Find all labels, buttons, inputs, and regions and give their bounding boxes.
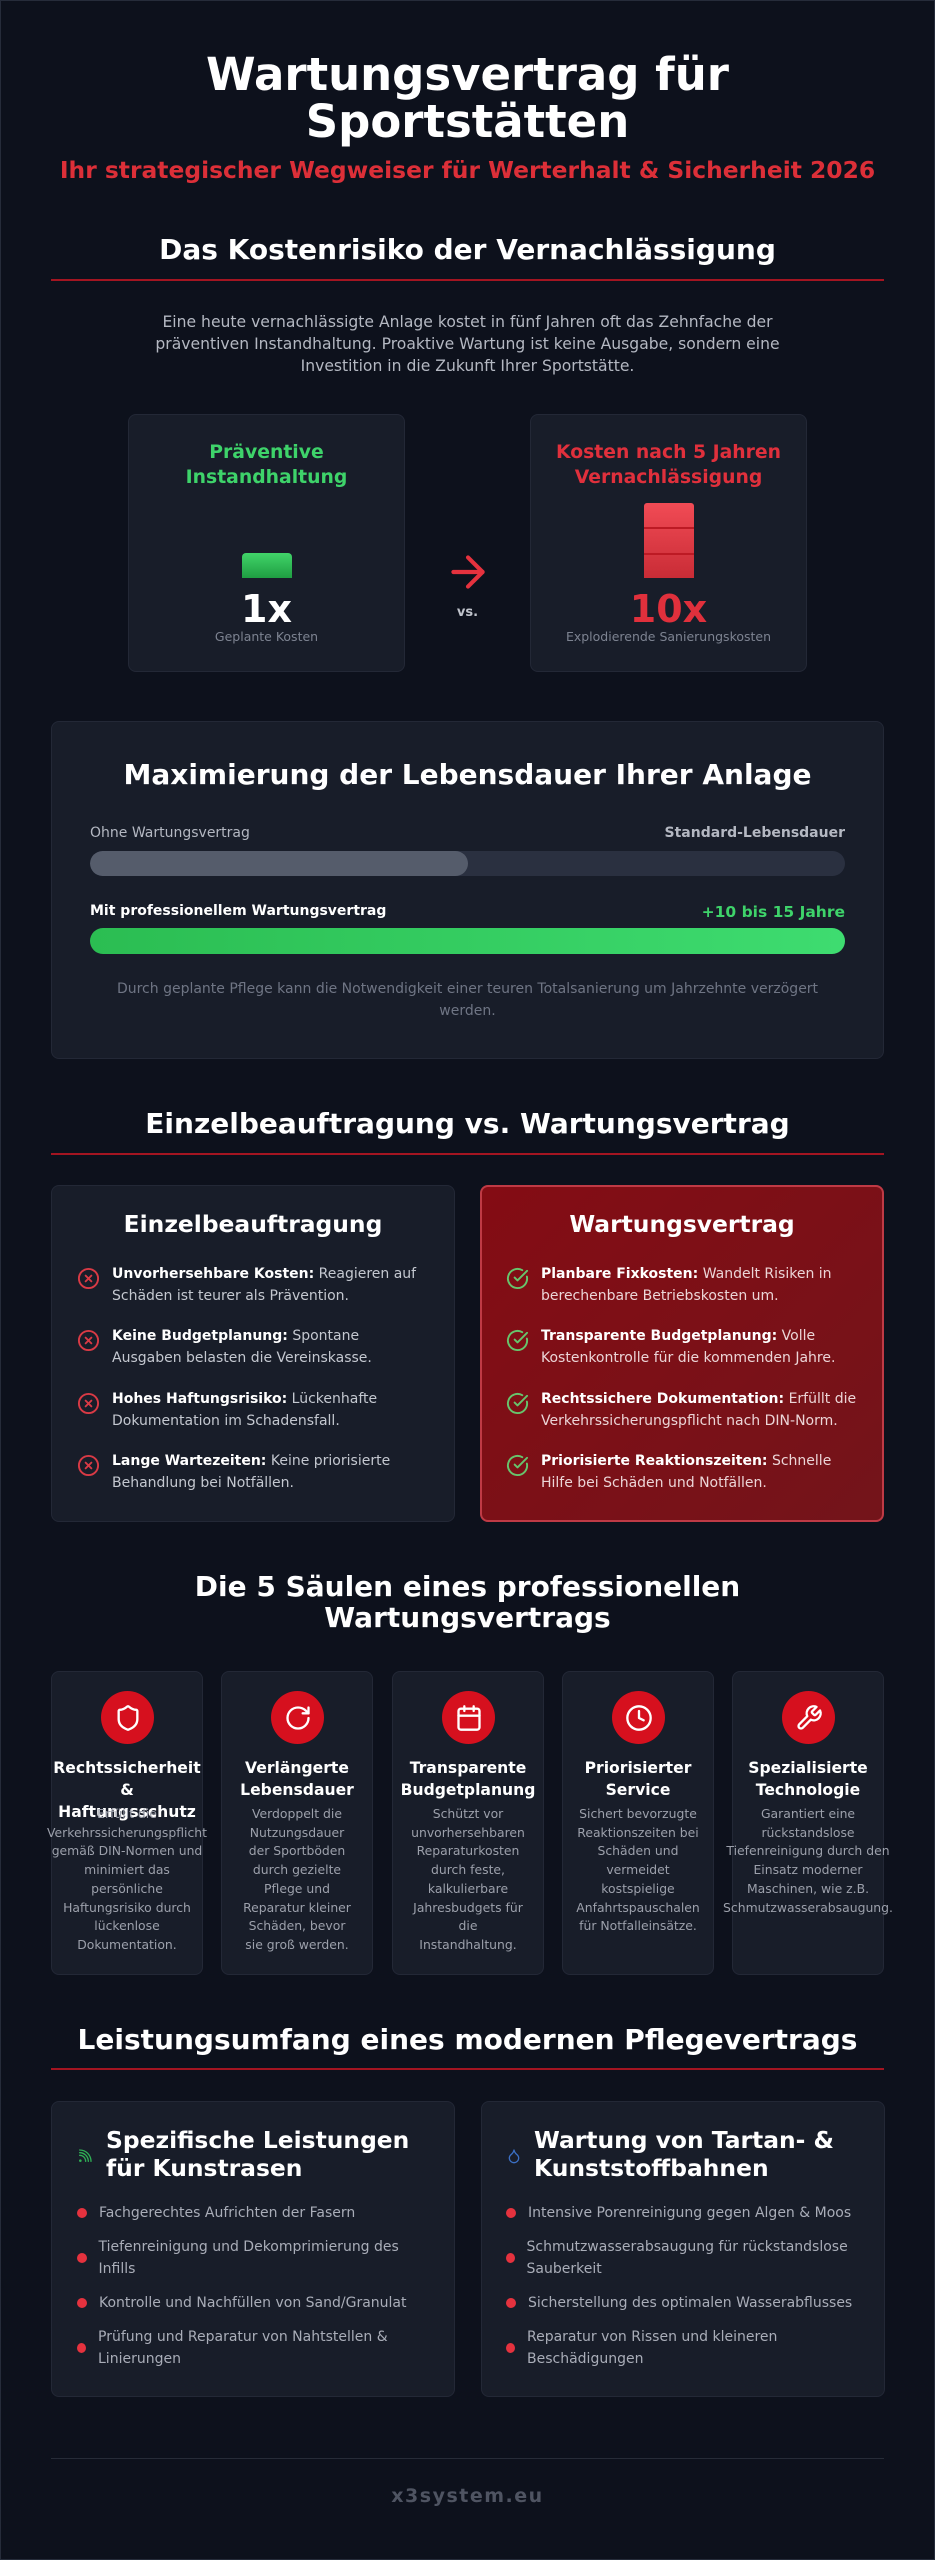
pillar text: Dokumentation. — [77, 1937, 177, 1952]
pillar text: rückstandslose — [761, 1825, 855, 1840]
panel heading: Kunststoffbahnen — [534, 2154, 769, 2182]
card heading red: Kosten nach 5 Jahren — [556, 442, 781, 463]
item 1: Planbare Fixkosten: Wandelt Risiken in — [541, 1266, 832, 1282]
intro text: Investition in die Zukunft Ihrer Sportstätte. — [301, 357, 634, 375]
icon: shield — [101, 1691, 154, 1744]
list item 4 — [77, 2328, 388, 2366]
list item 2 — [506, 2238, 848, 2276]
pillar text: durch gezielte — [253, 1862, 341, 1877]
pillar 3 — [392, 1671, 544, 1975]
card heading red: Vernachlässigung — [575, 467, 762, 488]
pillar text — [243, 1806, 351, 1952]
pillar text: Garantiert eine — [761, 1806, 855, 1821]
card heading green — [186, 442, 347, 488]
pillar 5 — [732, 1671, 884, 1975]
panel: Kunstrasen — [51, 2101, 455, 2397]
pillar title: Service — [606, 1781, 670, 1799]
icon: refresh — [271, 1691, 324, 1744]
item 3 — [78, 1391, 377, 1429]
pillar 4 — [562, 1671, 714, 1975]
pillar title — [53, 1759, 201, 1821]
pillar title: Haftungsschutz — [58, 1803, 196, 1821]
item 1 — [506, 1266, 832, 1304]
label right 1: Standard-Lebensdauer — [665, 825, 845, 841]
item 4 — [78, 1453, 390, 1491]
item 1 — [78, 1266, 416, 1304]
pillar title: Technologie — [756, 1781, 860, 1799]
subtitle: Ihr strategischer Wegweiser für Werterhalt & Sicherheit 2026 — [60, 156, 875, 184]
heading: 5 Säulen: Wartungsvertrags — [324, 1601, 611, 1634]
pillar text: Pflege und — [264, 1881, 330, 1896]
card heading green: Instandhaltung — [186, 467, 347, 488]
panel heading: Spezifische Leistungen — [106, 2126, 409, 2154]
pillar text: Schäden und — [598, 1843, 678, 1858]
item 4 — [506, 1453, 831, 1491]
pillar title: Lebensdauer — [240, 1781, 354, 1799]
pillar text — [723, 1806, 893, 1915]
intro text: präventiven Instandhaltung. Proaktive Wartung ist keine Ausgabe, sondern eine — [155, 335, 780, 353]
vs label: vs. — [457, 605, 478, 620]
item 4: Priorisierte Reaktionszeiten: Schnelle — [541, 1453, 831, 1469]
icon: droplet — [508, 2149, 520, 2164]
pillar text: Schmutzwasserabsaugung. — [723, 1900, 893, 1915]
pillar text: minimiert das — [84, 1862, 170, 1877]
list item 1: Fachgerechtes Aufrichten der Fasern — [99, 2204, 355, 2220]
pillar text: gemäß DIN-Normen und — [52, 1843, 202, 1858]
item 1: Unvorhersehbare Kosten: Reagieren auf — [112, 1266, 416, 1282]
list item 2: Infills — [98, 2260, 135, 2276]
pillar text: Haftungsrisiko durch — [63, 1900, 191, 1915]
pillar 1 — [51, 1671, 203, 1975]
icon: rss — [79, 2149, 92, 2162]
item 2: Kostenkontrolle für die kommenden Jahre. — [541, 1350, 835, 1366]
pillar text: Tiefenreinigung durch den — [726, 1843, 890, 1858]
item 3: Hohes Haftungsrisiko: Lückenhafte — [112, 1391, 377, 1407]
pillar title: Priorisierter — [585, 1759, 691, 1777]
item 2: Ausgaben belasten die Vereinskasse. — [112, 1350, 372, 1366]
item 1: berechenbare Betriebskosten um. — [541, 1288, 779, 1304]
label left 1: Ohne Wartungsvertrag — [90, 825, 250, 841]
item 3: Rechtssichere Dokumentation: Erfüllt die — [541, 1391, 856, 1407]
list item 2: Schmutzwasserabsaugung für rückstandslose — [526, 2238, 848, 2254]
list item 4: Prüfung und Reparatur von Nahtstellen & — [98, 2328, 388, 2344]
panel: Tartan — [481, 2101, 885, 2397]
list item 4: Linierungen — [98, 2350, 181, 2366]
title — [206, 48, 729, 148]
pillar text: Schützt vor — [433, 1806, 503, 1821]
list item 2: Sauberkeit — [526, 2260, 602, 2276]
panel caption — [117, 981, 818, 1019]
heading: Kostenrisiko: Das Kostenrisiko der Vernachlässigung — [159, 233, 776, 266]
list item 2 — [77, 2238, 399, 2276]
item 2: Keine Budgetplanung: Spontane — [112, 1328, 359, 1344]
pillar text: Nutzungsdauer — [250, 1825, 344, 1840]
card heading red — [556, 442, 781, 488]
pillar title: & — [120, 1781, 134, 1799]
pillar text: Erfüllt die — [97, 1806, 157, 1821]
pillar text — [411, 1806, 525, 1952]
pillar text: Sichert bevorzugte — [579, 1806, 697, 1821]
pillar text: kalkulierbare — [428, 1881, 508, 1896]
pillar text: Maschinen, wie z.B. — [747, 1881, 869, 1896]
caption: Explodierende Sanierungskosten — [566, 629, 771, 644]
pillar title: Verlängerte — [245, 1759, 349, 1777]
item 3: Dokumentation im Schadensfall. — [112, 1413, 340, 1429]
item 1: Schäden ist teurer als Prävention. — [112, 1288, 349, 1304]
pillar text: Reparatur kleiner — [243, 1900, 351, 1915]
panel row: 5 Säulen — [47, 1671, 893, 1975]
heading: 5 Säulen — [195, 1570, 740, 1634]
caption: Geplante Kosten — [215, 629, 318, 644]
bar: 10x stacked blocks — [644, 503, 694, 578]
icon: clock — [612, 1691, 665, 1744]
panel caption: werden. — [439, 1003, 496, 1019]
bar: ohne Vertrag — [90, 851, 845, 876]
pillar title: Spezialisierte — [748, 1759, 868, 1777]
pillar text: Anfahrtspauschalen — [576, 1900, 700, 1915]
label left 2: Mit professionellem Wartungsvertrag — [90, 903, 386, 919]
intro text — [155, 313, 780, 375]
pillar text: Jahresbudgets für — [413, 1900, 523, 1915]
pillar text: durch feste, — [431, 1862, 505, 1877]
pillar text: persönliche — [91, 1881, 163, 1896]
pillar text: die — [459, 1918, 477, 1933]
pillar text: Verdoppelt die — [252, 1806, 342, 1821]
item 2: Transparente Budgetplanung: Volle — [541, 1328, 815, 1344]
panel heading: Wartungsvertrag — [569, 1210, 795, 1238]
arrow vs — [451, 555, 485, 620]
title: Wartungsvertrag für — [206, 48, 729, 101]
pillar text: Verkehrssicherungspflicht — [47, 1825, 207, 1840]
panel: präventive Instandhaltung — [128, 414, 405, 672]
item 2 — [506, 1328, 835, 1366]
list item 1: Intensive Porenreinigung gegen Algen & Moos — [528, 2204, 851, 2220]
pillar text: Instandhaltung. — [419, 1937, 517, 1952]
pillar text: Einsatz moderner — [753, 1862, 863, 1877]
pillar title: Transparente — [410, 1759, 526, 1777]
panel heading: Einzelbeauftragung — [124, 1210, 382, 1238]
pillar title: Budgetplanung — [401, 1781, 535, 1799]
panel heading — [106, 2126, 409, 2182]
pillar text: der Sportböden — [249, 1843, 345, 1858]
pillar text: für Notfalleinsätze. — [579, 1918, 697, 1933]
pillar title — [748, 1759, 868, 1799]
list item 4: Beschädigungen — [527, 2350, 643, 2366]
list item 3: Kontrolle und Nachfüllen von Sand/Granulat — [99, 2294, 406, 2310]
item 4: Lange Wartezeiten: Keine priorisierte — [112, 1453, 390, 1469]
pillar 2 — [221, 1671, 373, 1975]
pillar text: Schäden, bevor — [249, 1918, 345, 1933]
list item 2: Tiefenreinigung und Dekomprimierung des — [98, 2238, 399, 2254]
pillar title — [401, 1759, 535, 1799]
pillar text: Reaktionszeiten bei — [577, 1825, 699, 1840]
panel heading — [534, 2126, 834, 2182]
item 4: Hilfe bei Schäden und Notfällen. — [541, 1475, 767, 1491]
intro text: Eine heute vernachlässigte Anlage kostet in fünf Jahren oft das Zehnfache der — [162, 313, 773, 331]
panel heading: für Kunstrasen — [106, 2154, 302, 2182]
pillar title — [585, 1759, 692, 1799]
pillar text: Reparaturkosten — [417, 1843, 519, 1858]
card heading green: Präventive — [209, 442, 324, 463]
pillar text: lückenlose — [94, 1918, 160, 1933]
item 4: Behandlung bei Notfällen. — [112, 1475, 294, 1491]
pillar text: vermeidet — [606, 1862, 670, 1877]
title: Sportstätten — [306, 95, 629, 148]
pillar text: sie groß werden. — [245, 1937, 349, 1952]
list item 3: Sicherstellung des optimalen Wasserabflusses — [528, 2294, 852, 2310]
pillar text — [576, 1806, 700, 1933]
value 10x: 10x — [630, 587, 707, 631]
bar: mit Vertrag — [90, 928, 845, 954]
icon: calendar — [442, 1691, 495, 1744]
pillar text: unvorhersehbaren — [411, 1825, 525, 1840]
icon: arrow right — [451, 555, 485, 589]
heading: Leistungsumfang: Leistungsumfang eines modernen Pflegevertrags — [78, 2023, 857, 2056]
item 3: Verkehrssicherungspflicht nach DIN-Norm. — [541, 1413, 838, 1429]
footer brand: x3system.eu — [391, 2485, 544, 2507]
list item 4: Reparatur von Rissen und kleineren — [527, 2328, 777, 2344]
list item 4 — [506, 2328, 777, 2366]
icon: wrench — [782, 1691, 835, 1744]
heading: 5 Säulen: Die 5 Säulen eines professionellen — [195, 1570, 740, 1603]
pillar text — [47, 1806, 207, 1952]
panel heading: Maximierung der Lebensdauer Ihrer Anlage — [124, 758, 811, 791]
panel heading: Wartung von Tartan- & — [534, 2126, 834, 2154]
panel: Kosten nach 5 Jahren — [530, 414, 807, 672]
panel: Lebensdauer — [51, 721, 884, 1059]
pillar title — [240, 1759, 354, 1799]
pillar title: Rechtssicherheit — [53, 1759, 201, 1777]
value 1x: 1x — [241, 587, 292, 631]
pillar text: kostspielige — [601, 1881, 675, 1896]
bar: 1x cost block — [242, 553, 292, 578]
panel: Wartungsvertrag — [480, 1185, 884, 1522]
item 3 — [506, 1391, 856, 1429]
heading: Vergleich: Einzelbeauftragung vs. Wartungsvertrag — [145, 1107, 790, 1140]
label right 2: +10 bis 15 Jahre — [702, 903, 845, 921]
panel caption: Durch geplante Pflege kann die Notwendigkeit einer teuren Totalsanierung um Jahrzehnte verzögert — [117, 981, 818, 997]
panel: Einzelbeauftragung — [51, 1185, 455, 1522]
item 2 — [78, 1328, 372, 1366]
